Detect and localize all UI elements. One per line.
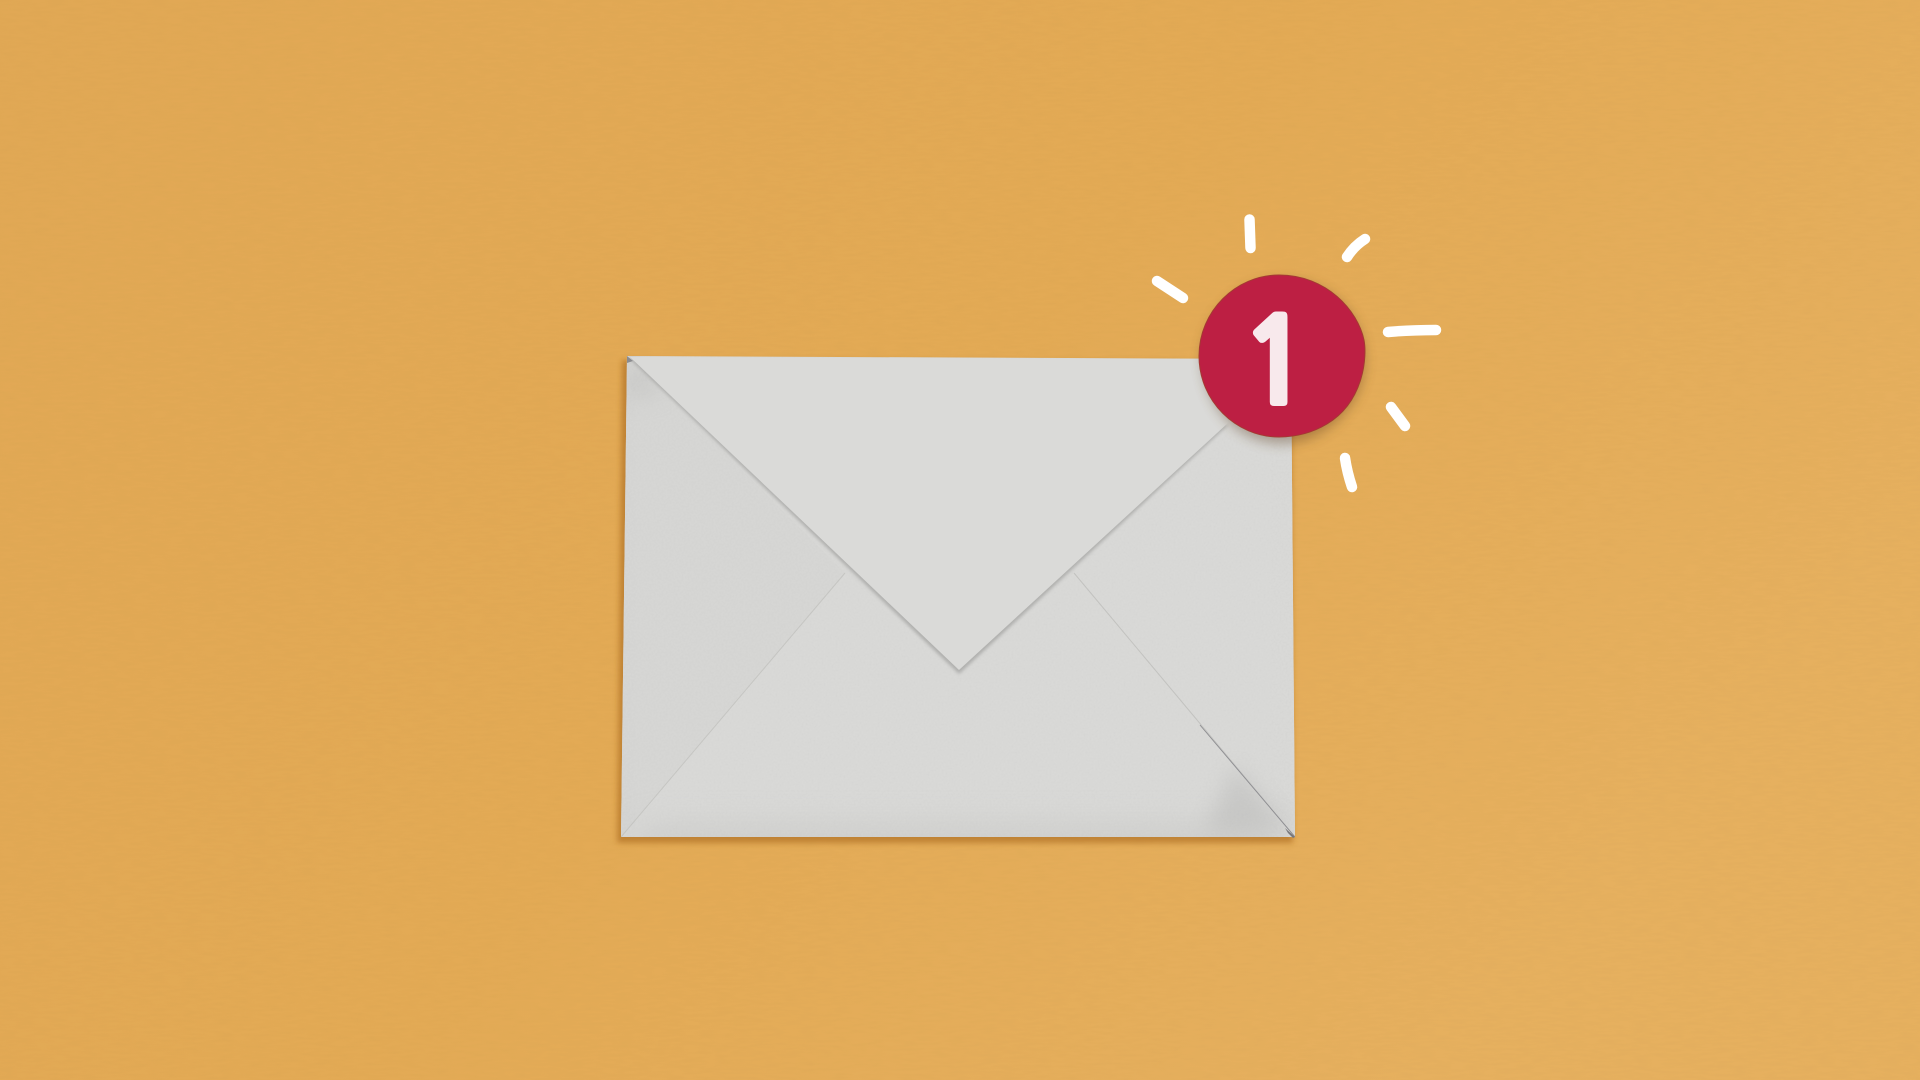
ray: upper left [1157,281,1183,298]
top flap shadow [629,358,1228,674]
badge disc [1199,275,1365,437]
badge numeral: 1 [1240,304,1312,421]
ray: right [1388,330,1436,332]
envelope shadow [617,360,1293,843]
ray: lower right [1391,407,1405,426]
right side panel [1074,359,1295,837]
bottom flap [621,356,1295,860]
attention rays [1157,220,1436,487]
top flap [630,357,1228,670]
corner accents [627,356,633,363]
envelope [617,356,1295,860]
badge shadow [1202,280,1365,444]
envelope body [621,356,1295,837]
ray: bottom [1345,458,1352,487]
ray: upper right [1347,239,1365,257]
left side panel [621,356,845,837]
ray: top [1250,220,1251,248]
badge: notification counter [1199,275,1365,444]
